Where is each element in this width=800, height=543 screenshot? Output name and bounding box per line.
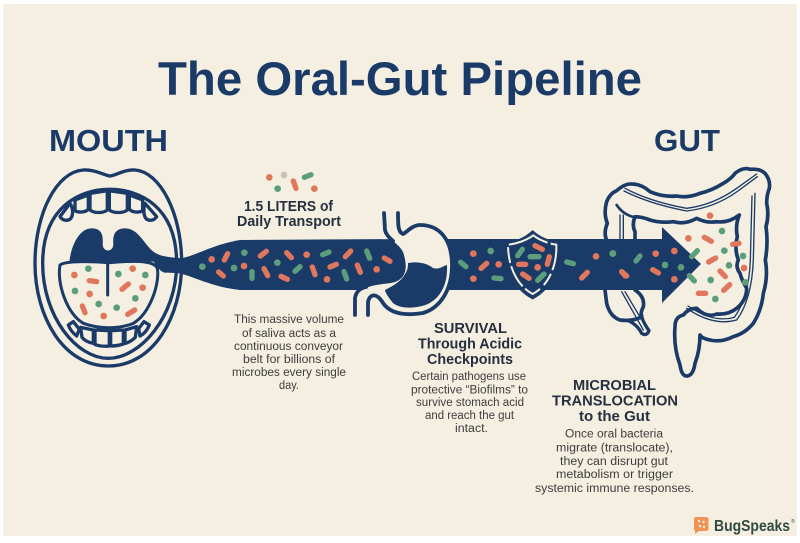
text: saliva description: This massive volume xyxy=(234,314,344,326)
arrow into gut xyxy=(470,227,701,303)
appendix xyxy=(625,315,649,335)
shield broken outline xyxy=(508,235,556,294)
heading: daily transport: Daily Transport xyxy=(237,214,341,230)
registered mark: ® xyxy=(791,518,795,525)
text: translocation description: they can disrupt gut xyxy=(560,456,669,468)
icon: biofilm shield xyxy=(505,231,560,298)
heading: daily transport xyxy=(237,199,341,230)
text: saliva description: day. xyxy=(279,380,299,392)
heading: survival: SURVIVAL xyxy=(434,321,507,337)
stomach acid xyxy=(385,262,447,308)
bacteria in second pipe section xyxy=(461,248,627,282)
icon: open mouth xyxy=(35,170,183,366)
bacteria in first pipe section xyxy=(199,249,390,283)
stomach body xyxy=(355,213,452,315)
text: saliva description: microbes every single xyxy=(232,367,346,379)
text: translocation description: Once oral bacteria xyxy=(565,428,664,440)
bacteria cluster above transport label xyxy=(266,172,318,192)
tongue centre line xyxy=(103,263,112,295)
title: The Oral-Gut Pipeline xyxy=(158,52,642,105)
text: translocation description xyxy=(535,428,694,495)
heading: microbial translocation xyxy=(552,378,678,425)
text: survival description xyxy=(411,371,528,435)
inner lips xyxy=(43,189,177,358)
icon: stomach xyxy=(355,213,452,315)
logo icon xyxy=(694,517,708,534)
text: saliva description: of saliva acts as a xyxy=(242,328,337,340)
logo wordmark: BugSpeaks xyxy=(714,518,790,535)
lower teeth xyxy=(68,322,149,346)
outer lips xyxy=(35,170,182,366)
heading: microbial translocation: MICROBIAL xyxy=(573,378,656,394)
icon: intestines xyxy=(605,169,770,376)
text: survival description: Certain pathogens use xyxy=(412,371,526,383)
heading: survival: Through Acidic xyxy=(418,336,522,352)
pipeline from mouth to stomach xyxy=(170,239,412,290)
text: survival description: protective “Biofilms” to xyxy=(411,384,528,396)
text: saliva description: belt for billions of xyxy=(243,354,336,366)
colon outline xyxy=(605,169,770,376)
throat and uvula xyxy=(69,228,183,273)
text: survival description: and reach the gut xyxy=(425,410,515,422)
tongue xyxy=(59,261,158,328)
shield body xyxy=(505,231,560,298)
heading: mouth: MOUTH xyxy=(49,123,168,158)
logo: BugSpeaks xyxy=(694,517,795,535)
upper teeth xyxy=(60,191,157,220)
text: translocation description: migrate (translocate), xyxy=(556,442,673,454)
heading: daily transport: 1.5 LITERS of xyxy=(244,199,333,215)
tongue bacteria xyxy=(71,265,149,319)
text: survival description: intact. xyxy=(455,423,488,435)
pipeline arrow from stomach to gut placeholder band xyxy=(445,239,475,290)
text: saliva description xyxy=(232,314,346,392)
heading: microbial translocation: to the Gut xyxy=(579,409,650,425)
heading: survival: Checkpoints xyxy=(427,352,513,368)
heading: microbial translocation: TRANSLOCATION xyxy=(552,394,678,410)
text: translocation description: metabolism or trigger xyxy=(556,469,673,481)
text: translocation description: systemic immune responses. xyxy=(535,483,694,495)
colon fold and inner lines xyxy=(617,205,635,217)
heading: gut: GUT xyxy=(654,123,720,158)
text: saliva description: continuous conveyor xyxy=(234,341,343,353)
shield bacteria xyxy=(519,246,549,278)
bacteria in arrow and gut xyxy=(609,212,749,302)
heading: survival xyxy=(418,321,522,368)
stomach outline xyxy=(355,213,452,315)
text: survival description: survive stomach acid xyxy=(416,397,524,409)
